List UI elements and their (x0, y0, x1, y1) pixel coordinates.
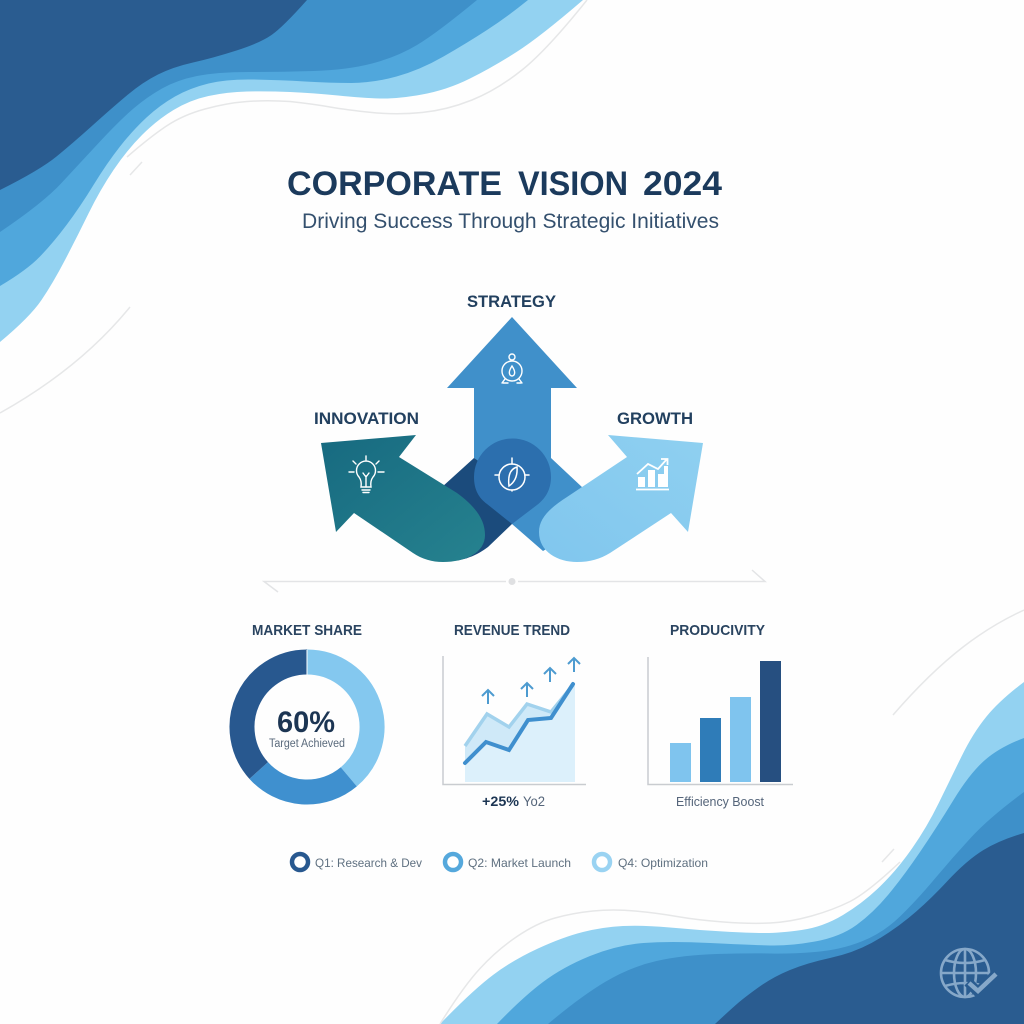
label: strategy: STRATEGY (467, 293, 556, 311)
line chart (443, 656, 586, 784)
title (287, 165, 722, 203)
heading: productivity: PRODUCIVITY (670, 622, 765, 639)
legend (292, 854, 708, 870)
navy overlap band (442, 458, 520, 561)
arrow: strategy (centre, upward) (447, 317, 583, 551)
icon: target figure (502, 354, 522, 383)
donut chart (242, 650, 372, 792)
legend item: Q4: Q4: Optimization (618, 856, 708, 870)
legend item: Q1: Q1: Research & Dev (315, 856, 422, 870)
label: innovation: INNOVATION (314, 410, 419, 428)
bar chart caption: Efficiency Boost (676, 795, 765, 809)
panel: market share (242, 622, 372, 792)
title: CORPORATE (287, 165, 502, 203)
donut value: 60% (277, 706, 335, 739)
icon: globe with check mark (941, 949, 997, 997)
arrow: growth (light blue, right) (539, 435, 703, 562)
label: growth: GROWTH (617, 410, 693, 428)
subtitle: Driving Success Through Strategic Initiatives (302, 209, 719, 233)
legend item: Q4 (594, 854, 708, 870)
centre teardrop overlap (474, 438, 551, 524)
top-left wave decoration (0, 0, 587, 413)
panel: productivity (648, 622, 793, 809)
trend caption suffix: Yo2 (523, 794, 545, 809)
heading: market share: MARKET SHARE (252, 622, 362, 639)
title: 2024 (643, 165, 722, 203)
icon: compass leaf (495, 458, 529, 491)
donut caption: Target Achieved (269, 738, 345, 750)
heading: revenue trend: REVENUE TREND (454, 622, 570, 639)
panel: revenue trend (443, 622, 586, 809)
divider arrow line (264, 570, 765, 592)
icon: light bulb (349, 456, 384, 492)
trend caption: +25% (482, 794, 519, 809)
bottom-right wave decoration (440, 610, 1024, 1024)
legend item: Q2: Q2: Market Launch (468, 856, 571, 870)
icon: growth chart (636, 459, 669, 490)
arrow: innovation (teal, left) (321, 435, 485, 562)
bar chart (648, 657, 793, 784)
title: VISION (518, 165, 628, 203)
arrow diagram (314, 293, 703, 562)
